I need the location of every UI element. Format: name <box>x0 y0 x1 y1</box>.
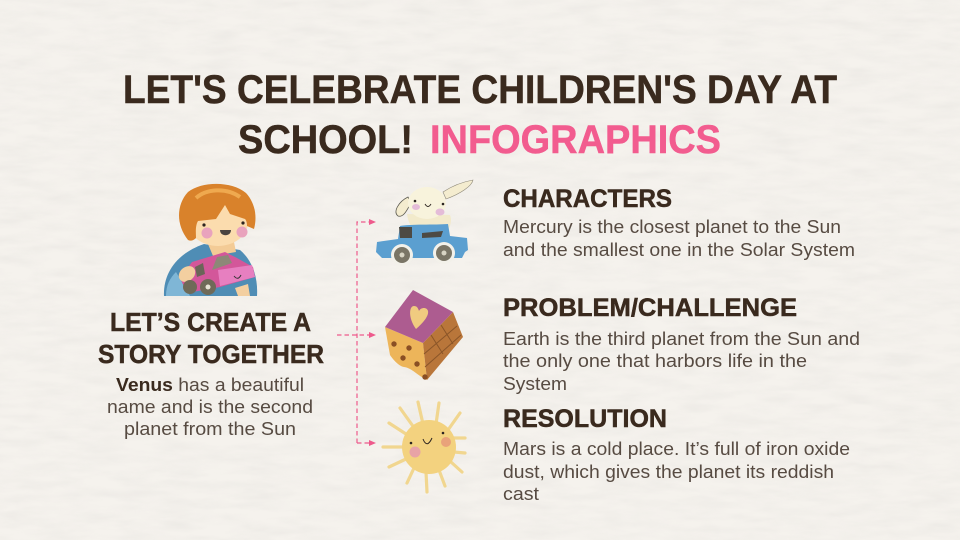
title: SCHOOL! <box>238 118 413 162</box>
icon: boy holding pink toy car <box>164 184 257 296</box>
text block: Venus description: name and is the second <box>107 397 313 417</box>
text block: Earth description: the only one that harbors life in the <box>503 351 807 371</box>
title: LET'S CELEBRATE CHILDREN'S DAY AT <box>123 68 837 112</box>
text block: Mercury description <box>503 217 855 260</box>
title: INFOGRAPHICS <box>430 118 721 162</box>
text block: Mercury description: and the smallest one in the Solar System <box>503 240 855 260</box>
icon: heart dice block <box>385 290 463 380</box>
arrows: dashed connector from story to three items <box>337 219 376 446</box>
text block: Mars description: dust, which gives the planet its reddish <box>503 462 834 482</box>
title <box>123 68 837 162</box>
heading: characters: CHARACTERS <box>503 185 672 213</box>
text block: Venus description: Venus has a beautiful <box>116 375 304 395</box>
heading: let's create a story together <box>98 307 324 369</box>
text block: Venus description: planet from the Sun <box>124 419 296 439</box>
text block: Venus description <box>107 375 313 439</box>
text block: Earth description <box>503 329 860 394</box>
text block: Mercury description: Mercury is the closest planet to the Sun <box>503 217 841 237</box>
heading: resolution: RESOLUTION <box>503 405 667 433</box>
text block: Mars description: cast <box>503 484 539 504</box>
text block: Mars description: Mars is a cold place. It’s full of iron oxide <box>503 439 850 459</box>
heading: problem/challenge: PROBLEM/CHALLENGE <box>503 294 797 322</box>
heading: let's create a story together: LET’S CREATE A <box>110 307 311 337</box>
text block: Mars description <box>503 439 850 504</box>
heading: let's create a story together: STORY TOGETHER <box>98 339 324 369</box>
icon: bunny in blue car <box>376 180 473 266</box>
icon: smiling sun <box>383 402 465 492</box>
text block: Earth description: Earth is the third planet from the Sun and <box>503 329 860 349</box>
text block: Earth description: System <box>503 374 567 394</box>
